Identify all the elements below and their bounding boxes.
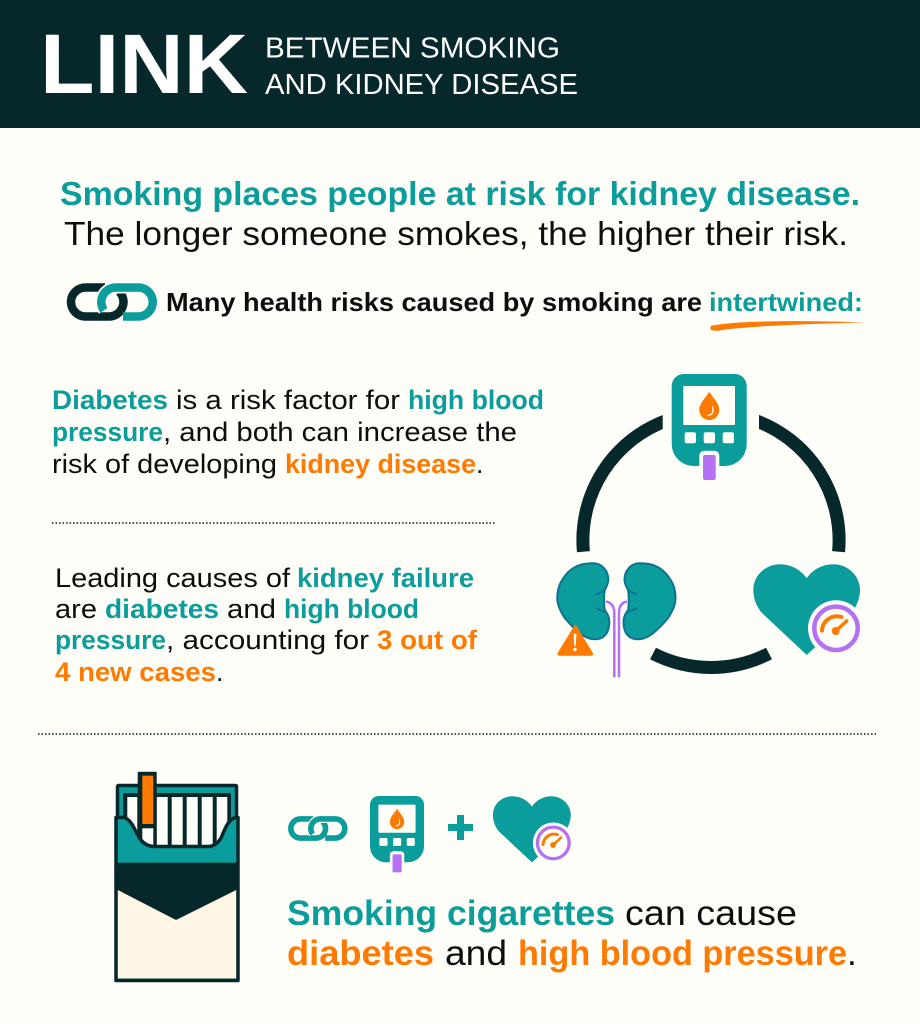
- subheading: intertwined risks: intertwined:: [709, 287, 863, 317]
- closing statement: can cause: [625, 894, 797, 933]
- icon row: link, meter, plus, heart: [291, 796, 574, 872]
- icon: glucose meter: [672, 374, 747, 480]
- text block: leading causes of kidney failure: 3 out of: [377, 625, 477, 655]
- text block: diabetes and blood pressure: [52, 385, 544, 479]
- illustration: cigarette pack: [116, 772, 238, 980]
- closing statement: .: [847, 934, 857, 973]
- text block: leading causes of kidney failure: pressure: [55, 625, 166, 655]
- text block: leading causes of kidney failure: kidney failure: [297, 563, 474, 593]
- icon: plus sign: [448, 815, 473, 840]
- closing statement: high blood pressure: [518, 934, 847, 973]
- text block: leading causes of kidney failure: and: [227, 594, 276, 624]
- icon: heart with gauge: [753, 564, 864, 656]
- icon: chain link: [71, 288, 153, 316]
- subtitle line 2: AND KIDNEY DISEASE: [265, 69, 578, 101]
- text block: leading causes of kidney failure: 4 new cases: [55, 657, 216, 687]
- text block: diabetes and blood pressure: Diabetes: [52, 385, 168, 415]
- icon: heart with gauge small: [493, 796, 574, 863]
- text block: leading causes of kidney failure: high blood: [284, 594, 419, 624]
- text block: leading causes of kidney failure: .: [216, 657, 223, 687]
- title: LINK: LINK: [40, 17, 248, 111]
- text block: diabetes and blood pressure: .: [476, 449, 483, 479]
- subheading: intertwined risks: [166, 287, 866, 331]
- ring arcs: [583, 405, 839, 667]
- closing statement: Smoking cigarettes: [287, 894, 615, 933]
- closing statement: diabetes: [287, 934, 434, 973]
- text block: leading causes of kidney failure: , accounting for: [166, 625, 369, 655]
- icon: glucose meter small: [370, 796, 424, 872]
- icon: kidneys with warning: [557, 563, 676, 677]
- subtitle line 1: BETWEEN SMOKING: [265, 32, 560, 64]
- text block: diabetes and blood pressure: , and both can increase the: [163, 417, 517, 447]
- closing statement: [287, 894, 857, 973]
- text block: diabetes and blood pressure: risk of developing: [52, 449, 277, 479]
- intro text block: Smoking places people at risk for kidney disease.: [60, 175, 860, 212]
- intro text block: [60, 175, 860, 252]
- icon: chain link small: [291, 819, 345, 838]
- text block: leading causes of kidney failure: [55, 563, 477, 687]
- text block: diabetes and blood pressure: kidney disease: [285, 449, 476, 479]
- text block: diabetes and blood pressure: high blood: [408, 385, 544, 415]
- intro text block: The longer someone smokes, the higher their risk.: [64, 215, 848, 252]
- text block: leading causes of kidney failure: diabetes: [105, 594, 219, 624]
- header banner: [0, 0, 920, 128]
- text block: diabetes and blood pressure: is a risk factor for: [176, 385, 400, 415]
- text block: leading causes of kidney failure: are: [55, 594, 97, 624]
- subheading: intertwined risks: Many health risks caused by smoking are: [166, 287, 702, 317]
- text block: diabetes and blood pressure: pressure: [52, 417, 163, 447]
- cycle diagram: [557, 374, 864, 677]
- closing statement: and: [445, 934, 507, 973]
- text block: leading causes of kidney failure: Leading causes of: [55, 563, 291, 593]
